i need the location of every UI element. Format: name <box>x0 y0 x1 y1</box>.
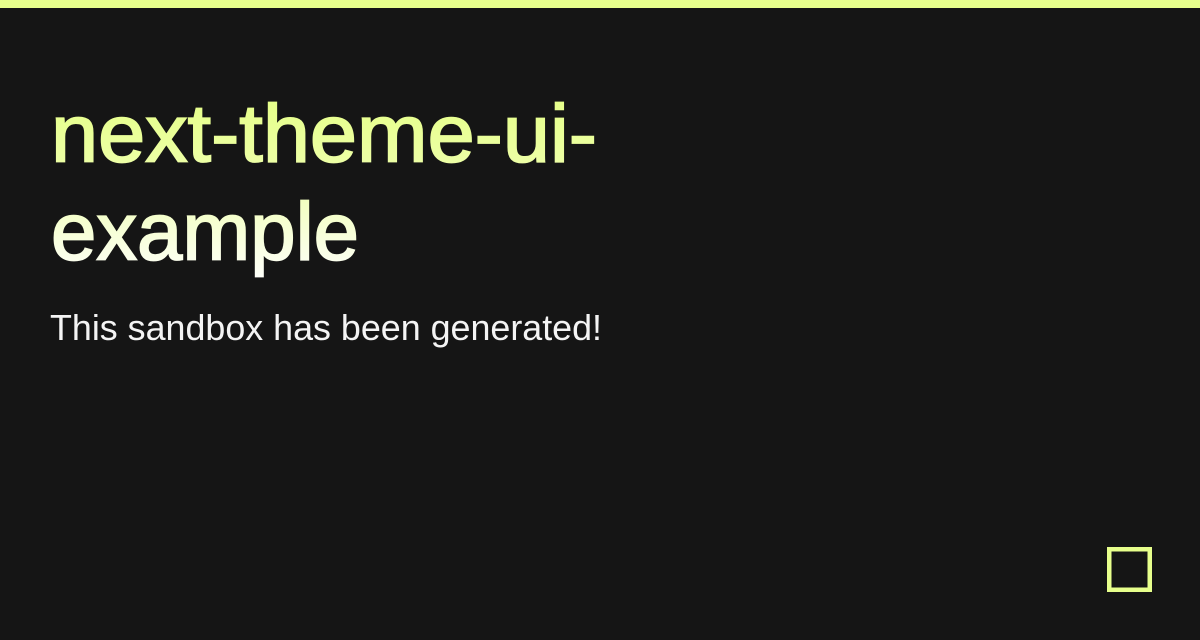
title: example <box>51 186 359 278</box>
icon: square logo <box>1109 549 1150 590</box>
top accent bar <box>0 0 1200 8</box>
subtitle: This sandbox has been generated! <box>50 307 602 348</box>
title <box>51 88 597 278</box>
title: next-theme-ui- <box>51 88 597 180</box>
